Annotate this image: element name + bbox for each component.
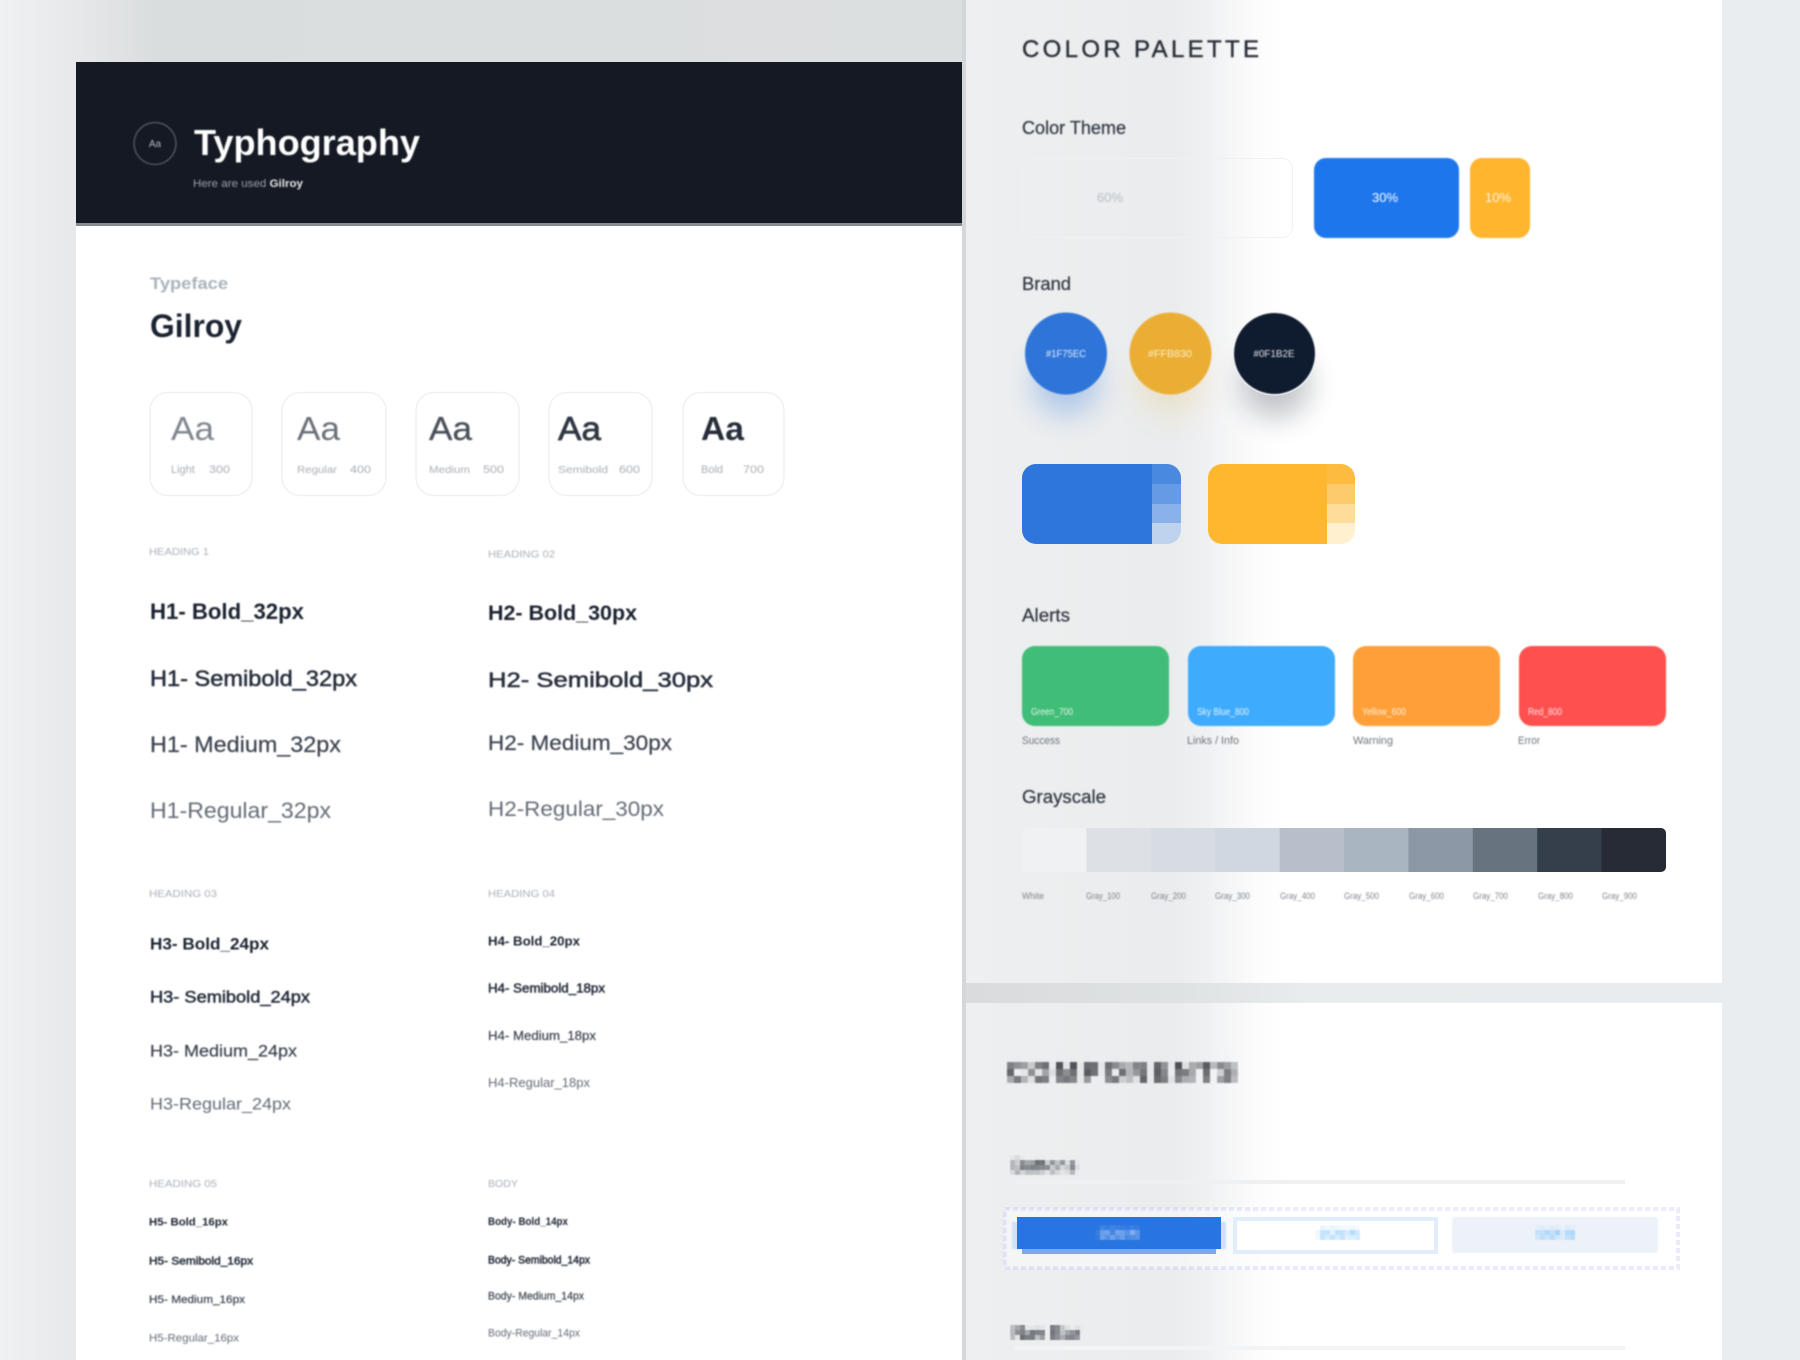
heading 5 samples: H5- Medium_16px xyxy=(149,1294,246,1306)
brand label: Brand xyxy=(1022,274,1071,294)
heading 1 samples: HEADING 1 xyxy=(149,547,209,558)
button outline xyxy=(1235,1219,1436,1252)
subtitle: Here are used Gilroy xyxy=(193,178,304,190)
alert info: Links / Info xyxy=(1187,735,1239,747)
brand circle yellow: #FFB830 xyxy=(1148,348,1192,360)
card: bold: Bold xyxy=(701,464,723,476)
button tinted xyxy=(1452,1217,1658,1253)
button tinted: SIGN IN xyxy=(1537,1225,1575,1241)
card: light: 300 xyxy=(209,464,230,476)
heading 1 samples: H1-Regular_32px xyxy=(150,798,331,823)
brand circle navy: #0F1B2E xyxy=(1254,348,1294,360)
card: medium xyxy=(416,392,519,496)
alert success: Success xyxy=(1022,735,1060,747)
color palette panel body xyxy=(966,0,1722,983)
heading 3 samples: H3- Semibold_24px xyxy=(150,988,311,1006)
alert warning: Warning xyxy=(1353,735,1393,747)
card: light: Light xyxy=(171,464,195,476)
card: semibold: Aa xyxy=(558,410,602,447)
alert info xyxy=(1187,646,1335,747)
brand circle blue: #1F75EC xyxy=(1046,348,1086,360)
alert warning xyxy=(1353,646,1500,747)
heading 3 samples: H3- Bold_24px xyxy=(150,936,270,954)
alert warning: Yellow_600 xyxy=(1362,707,1406,718)
theme swatch 30% xyxy=(1314,158,1459,238)
heading 1 samples xyxy=(149,547,357,823)
heading 3 samples xyxy=(149,889,311,1114)
alert error xyxy=(1518,646,1666,747)
buttons underline xyxy=(1015,1180,1625,1184)
color theme ratio xyxy=(1022,158,1530,238)
icon: Aa circle xyxy=(134,122,176,164)
gap between right panels xyxy=(966,983,1722,1003)
yellow tint swatch xyxy=(1208,464,1355,544)
font weight cards xyxy=(150,392,784,496)
heading 5 samples: H5- Bold_16px xyxy=(149,1216,229,1228)
color theme label: Color Theme xyxy=(1022,118,1126,138)
grayscale labels: Gray_900 xyxy=(1602,891,1637,901)
grayscale labels: Gray_700 xyxy=(1473,891,1508,901)
card: medium: Aa xyxy=(429,410,473,447)
card: semibold xyxy=(549,392,652,496)
button primary: SIGN IN xyxy=(1098,1225,1138,1241)
body samples: BODY xyxy=(488,1179,518,1190)
blue tint swatch xyxy=(1022,464,1181,544)
heading 5 samples: H5- Semibold_16px xyxy=(149,1256,254,1268)
panel: typography xyxy=(76,62,962,1360)
components panel body xyxy=(966,1003,1722,1360)
grayscale labels: Gray_100 xyxy=(1086,891,1120,901)
title: Typhography xyxy=(194,122,420,163)
card: bold: Aa xyxy=(701,410,745,447)
heading 1 samples: H1- Semibold_32px xyxy=(150,666,357,691)
typography panel body xyxy=(76,226,962,1360)
body samples: Body- Medium_14px xyxy=(488,1290,584,1302)
grayscale labels: Gray_500 xyxy=(1344,891,1379,901)
theme swatch 60% xyxy=(1022,158,1292,238)
heading 1 samples: H1- Medium_32px xyxy=(150,732,341,757)
heading 4 samples: H4-Regular_18px xyxy=(488,1076,591,1090)
card: semibold: 600 xyxy=(619,464,640,476)
grayscale label: Grayscale xyxy=(1022,787,1106,807)
grayscale labels: Gray_600 xyxy=(1409,891,1444,901)
card: bold xyxy=(683,392,784,496)
heading 4 samples: H4- Bold_20px xyxy=(488,934,580,948)
heading 2 samples: HEADING 02 xyxy=(488,550,555,560)
heading 1 samples: H1- Bold_32px xyxy=(150,599,305,624)
theme swatch 30%: 30% xyxy=(1372,190,1398,205)
color palette heading: COLOR PALETTE xyxy=(1022,36,1259,63)
alerts label: Alerts xyxy=(1022,606,1070,626)
heading 4 samples: H4- Medium_18px xyxy=(488,1029,597,1043)
typeface name: Gilroy xyxy=(150,308,242,344)
theme swatch 60%: 60% xyxy=(1097,190,1123,205)
grayscale labels: Gray_200 xyxy=(1151,891,1186,901)
brand circles xyxy=(1025,312,1316,418)
typeface label: Typeface xyxy=(150,275,228,293)
body samples xyxy=(488,1179,590,1340)
heading 3 samples: H3- Medium_24px xyxy=(150,1042,298,1060)
heading 4 samples: HEADING 04 xyxy=(488,889,555,900)
alert success: Green_700 xyxy=(1031,707,1073,718)
heading 3 samples: H3-Regular_24px xyxy=(150,1096,292,1114)
panel divider strip xyxy=(962,0,966,1360)
card: light: Aa xyxy=(171,410,215,447)
body samples: Body- Bold_14px xyxy=(488,1216,569,1228)
components heading: COMPONENTS xyxy=(1007,1057,1236,1087)
card: bold: 700 xyxy=(743,464,764,476)
alert error: Error xyxy=(1518,735,1540,747)
grayscale labels: White xyxy=(1022,891,1044,901)
icon: Aa circle: Aa xyxy=(149,139,162,150)
heading 5 samples xyxy=(149,1179,254,1344)
heading 2 samples: H2- Bold_30px xyxy=(488,602,637,625)
heading 5 samples: HEADING 05 xyxy=(149,1179,217,1190)
card: regular: Aa xyxy=(297,410,341,447)
card: semibold: Semibold xyxy=(558,465,608,476)
button primary xyxy=(1012,1217,1226,1254)
heading 3 samples: HEADING 03 xyxy=(149,889,217,900)
heading 4 samples: H4- Semibold_18px xyxy=(488,982,606,996)
panel: components xyxy=(966,1003,1722,1360)
grayscale labels: Gray_300 xyxy=(1215,891,1250,901)
typography header banner xyxy=(76,62,962,226)
alert swatches xyxy=(1022,646,1666,747)
panel: color palette xyxy=(966,0,1722,983)
card: regular: Regular xyxy=(297,465,338,476)
nav bar label: Nav Bar xyxy=(1012,1323,1081,1343)
card: medium: Medium xyxy=(429,465,470,476)
brand circle blue xyxy=(1025,312,1107,416)
body samples: Body- Semibold_14px xyxy=(488,1254,590,1266)
card: regular xyxy=(282,392,386,496)
brand circle navy xyxy=(1232,312,1316,418)
alert info: Sky Blue_800 xyxy=(1197,707,1249,718)
grayscale bar xyxy=(1086,828,1666,872)
alert error: Red_800 xyxy=(1528,707,1562,718)
grayscale labels: Gray_400 xyxy=(1280,891,1315,901)
card: regular: 400 xyxy=(350,464,371,476)
brand circle yellow xyxy=(1130,312,1212,416)
heading 5 samples: H5-Regular_16px xyxy=(149,1332,240,1344)
heading 2 samples: H2- Medium_30px xyxy=(488,732,673,755)
theme swatch 10%: 10% xyxy=(1485,190,1511,205)
alert success xyxy=(1022,646,1169,747)
buttons label: Buttons xyxy=(1012,1156,1077,1176)
button outline: SIGN IN xyxy=(1318,1225,1358,1241)
grayscale labels xyxy=(1022,891,1637,901)
heading 4 samples xyxy=(488,889,606,1090)
card: light xyxy=(150,392,252,496)
nav bar underline xyxy=(1015,1346,1625,1350)
grayscale labels: Gray_800 xyxy=(1538,891,1573,901)
theme swatch 10% xyxy=(1470,158,1530,238)
body samples: Body-Regular_14px xyxy=(488,1328,580,1340)
heading 2 samples xyxy=(488,550,714,821)
heading 2 samples: H2- Semibold_30px xyxy=(488,669,714,692)
card: medium: 500 xyxy=(483,464,504,476)
button group frame xyxy=(1005,1209,1678,1268)
heading 2 samples: H2-Regular_30px xyxy=(488,798,665,821)
